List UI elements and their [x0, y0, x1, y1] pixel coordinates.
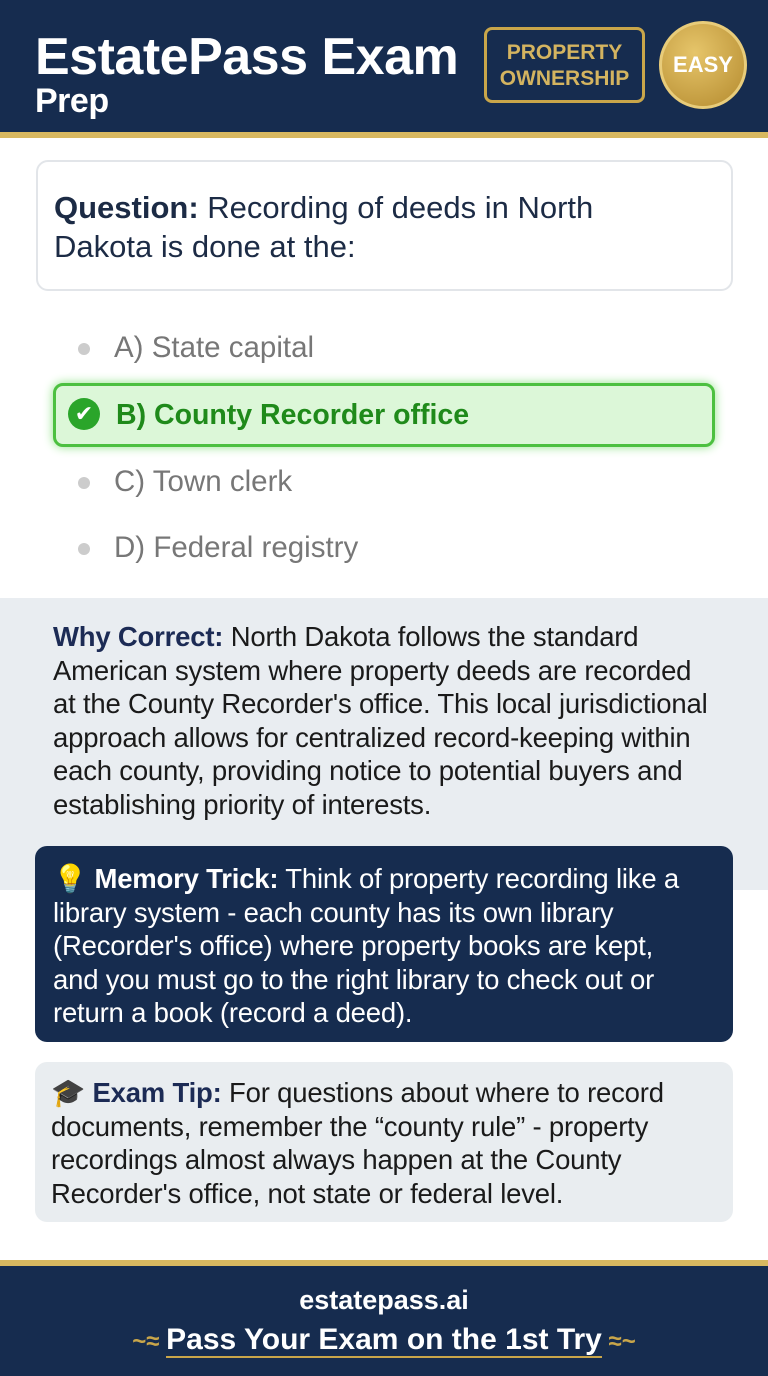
option C: C) Town clerk — [114, 465, 292, 498]
panel: exam tip: 🎓 Exam Tip: For questions about where to record documents, remember the “county rule” - property recordings almost always happen at the County Recorder's office, not state or federal level. — [51, 1077, 664, 1208]
panel: why correct — [0, 598, 768, 890]
title: EstatePass Exam — [35, 28, 458, 86]
title: Prep — [35, 82, 109, 120]
badge: category — [484, 27, 645, 103]
badge: category: OWNERSHIP — [500, 67, 629, 90]
icon: check: ✔ — [75, 401, 93, 426]
panel: memory trick: 💡 Memory Trick: Think of property recording like a library system - each county has its own library (Recorder's office) where property books are kept, and you must go to the right library to check out or return a book (record a deed). — [53, 863, 679, 1028]
badge: difficulty — [659, 21, 747, 109]
footer url: estatepass.ai — [299, 1285, 469, 1315]
option D: D) Federal registry — [114, 531, 358, 564]
badge: category: PROPERTY — [507, 41, 622, 64]
question box: Question: Recording of deeds in North Dakota is done at the: — [54, 190, 593, 264]
header — [0, 0, 768, 138]
title — [35, 28, 458, 120]
panel: why correct: Why Correct: North Dakota follows the standard American system where property deeds are recorded at the County Recorder's office. This local jurisdictional approach allows for centralized record-keeping within each county, providing notice to potential buyers and establishing priority of interests. — [53, 621, 707, 820]
option B correct — [53, 383, 715, 447]
option B correct: B) County Recorder office — [116, 399, 469, 431]
tagline: ~≈ Pass Your Exam on the 1st Try ≈~ — [132, 1323, 636, 1356]
question box — [36, 160, 733, 291]
option A: A) State capital — [114, 331, 314, 364]
icon: check — [68, 398, 100, 430]
badge: difficulty: EASY — [673, 52, 733, 77]
footer — [0, 1260, 768, 1376]
